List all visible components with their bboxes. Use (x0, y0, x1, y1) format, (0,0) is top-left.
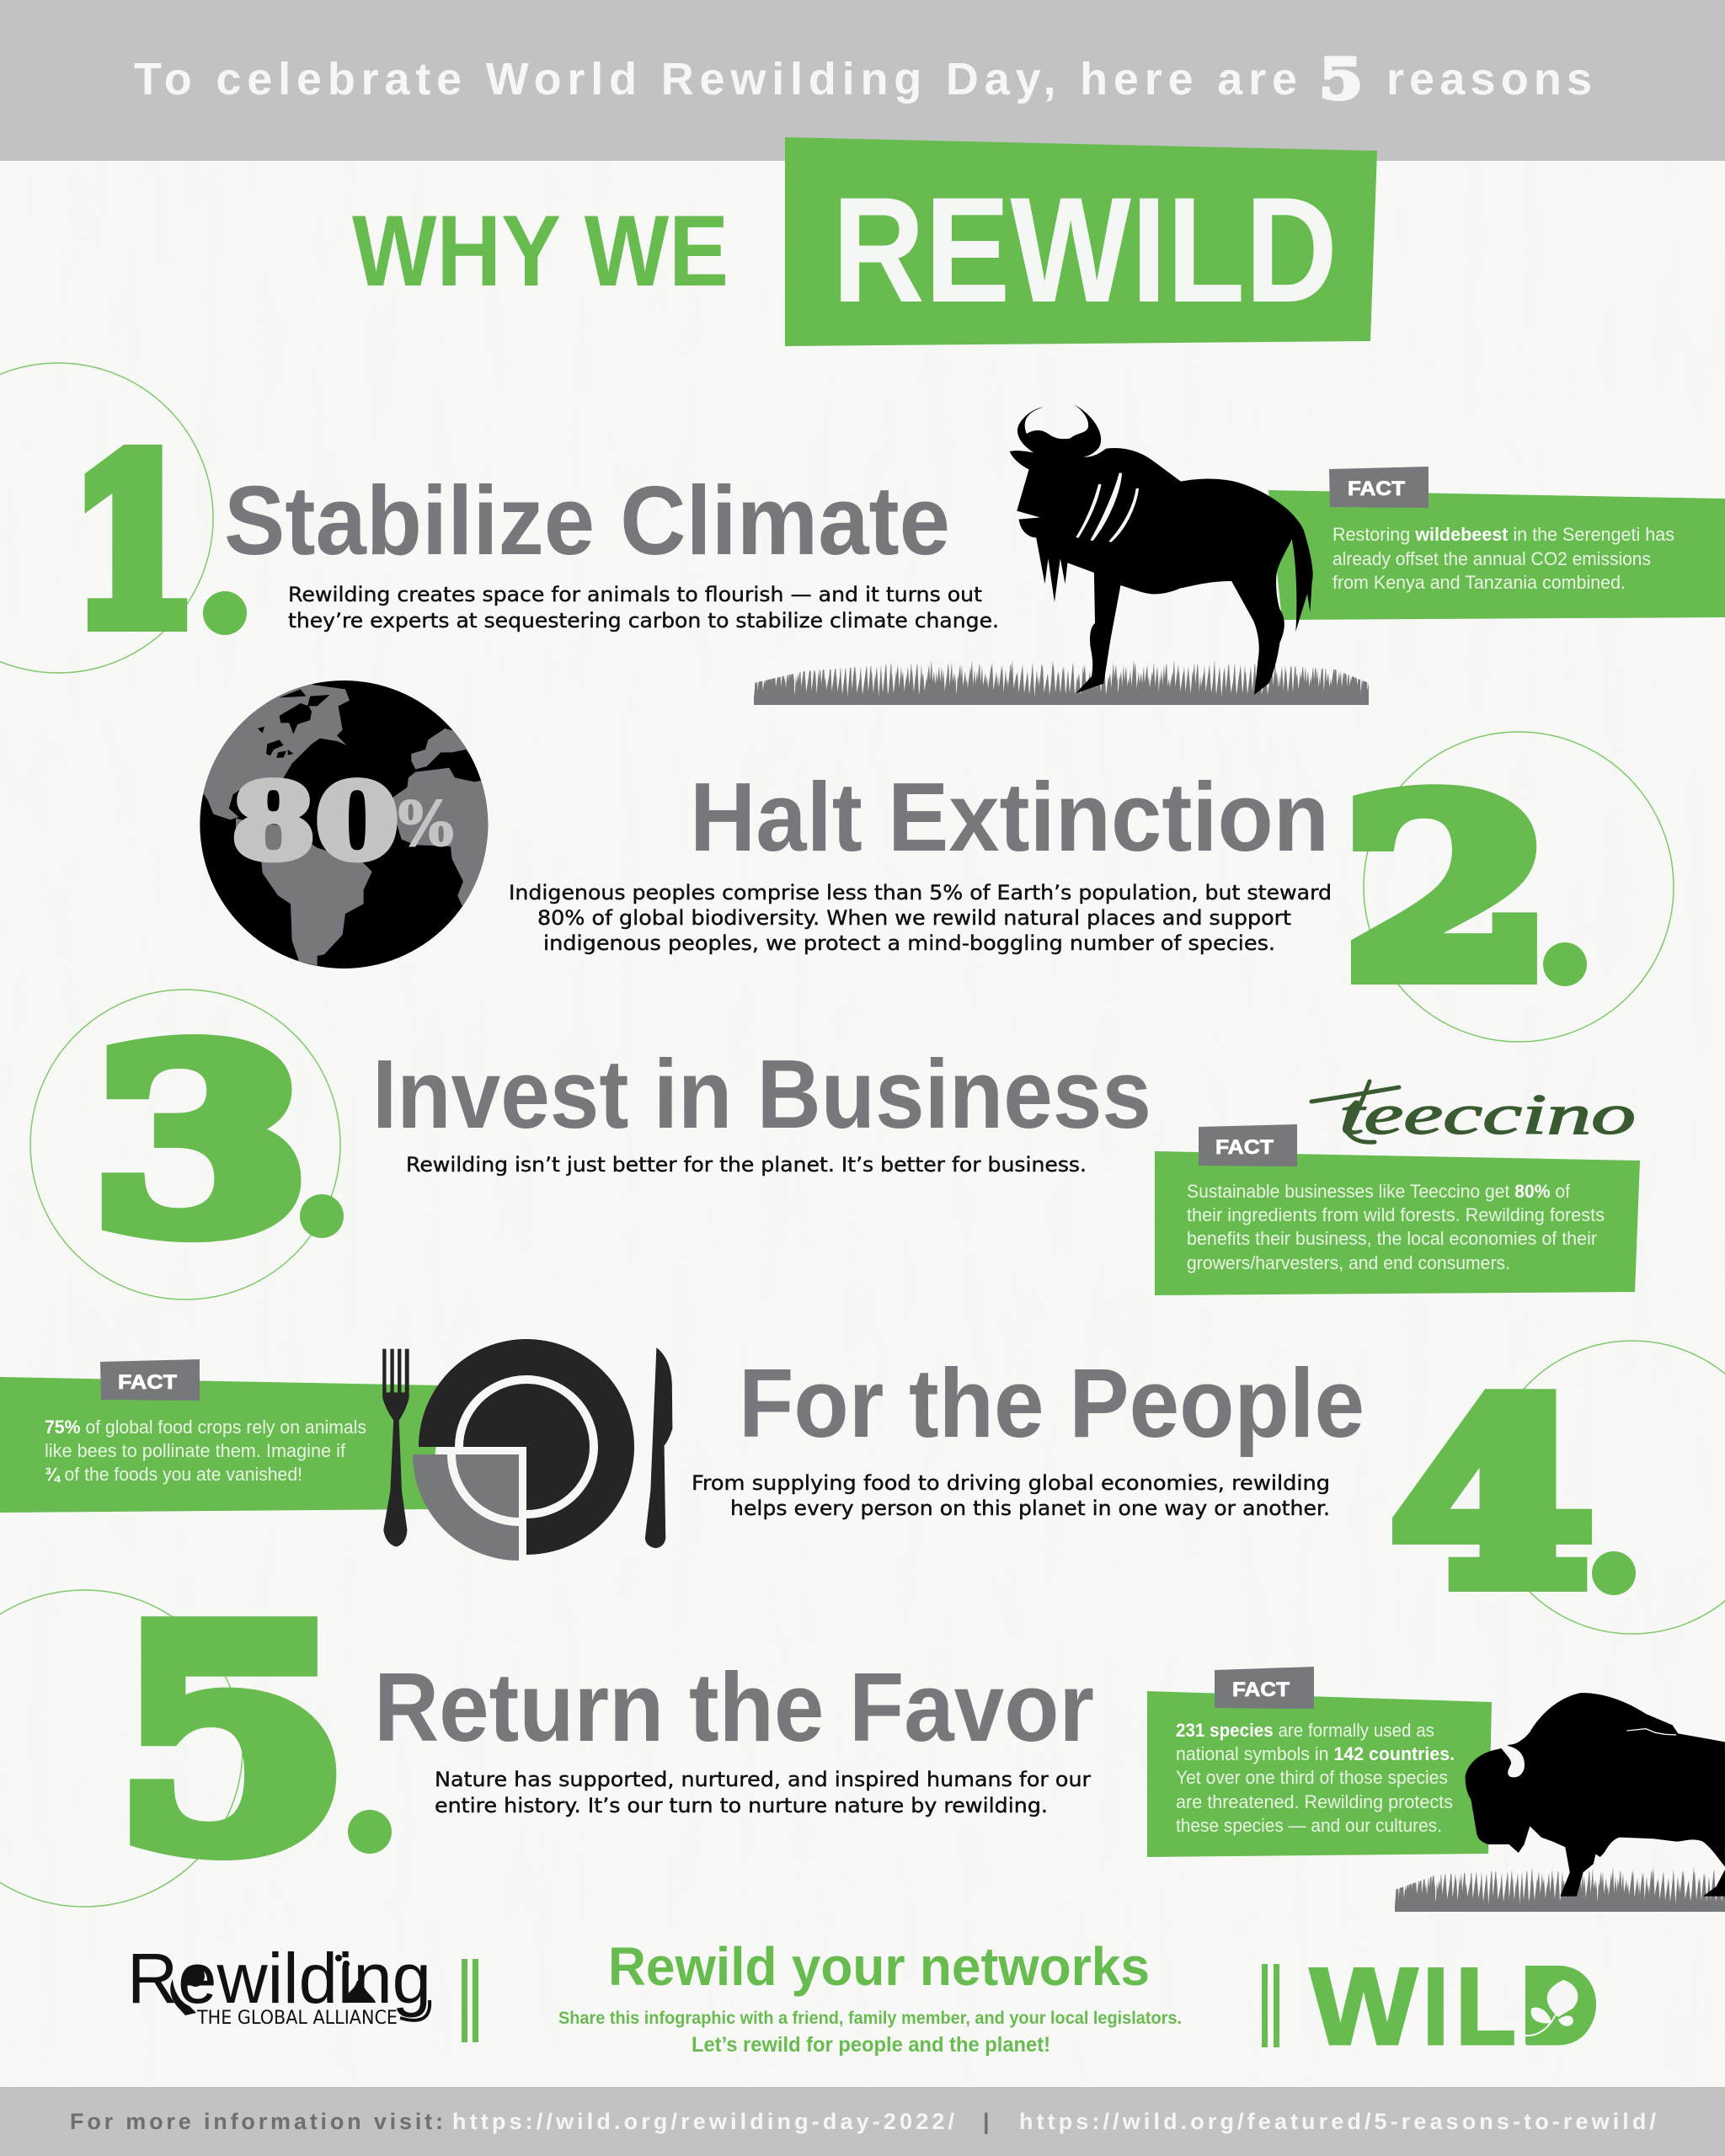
fact panel 4: 75% of global food crops rely on animals (45, 1417, 366, 1438)
call to action heading: Rewild your networks (608, 1936, 1150, 1997)
header band: 5 (1319, 46, 1363, 112)
icon: fork, plate and knife (382, 1339, 672, 1561)
logo: teeccino (1311, 1081, 1636, 1146)
fact panel 5: FACT (1232, 1678, 1290, 1701)
reason 3 heading: Invest in Business (372, 1039, 1151, 1149)
reason 5 text: Nature has supported, nurtured, and inspired humans for our (435, 1768, 1091, 1791)
logo: wild: L (1455, 1945, 1516, 2068)
logo: wild: D (1520, 1945, 1598, 2068)
reason 4 number: 4 (1392, 1351, 1592, 1640)
fact panel 5 (1147, 1667, 1492, 1857)
reason 4 text (692, 1471, 1330, 1520)
fact panel 3 (1155, 1124, 1640, 1295)
reason 1 heading: Stabilize Climate (224, 466, 950, 575)
icon: globe with 80%: % (398, 788, 454, 859)
fact panel 1: already offset the annual CO2 emissions (1332, 548, 1651, 569)
reason 2 number: 2 (1343, 747, 1551, 1032)
footer band: https://wild.org/featured/5-reasons-to-rewild/ (1019, 2109, 1656, 2134)
fact panel 1: Restoring wildebeest in the Serengeti has (1332, 524, 1674, 545)
reason 5 number (0, 1565, 392, 1916)
reason 2 text: 80% of global biodiversity. When we rewild natural places and support (537, 906, 1291, 930)
logo: wild: I (1423, 1945, 1449, 2068)
grass under bison (1395, 1865, 1725, 1912)
fact panel 1: from Kenya and Tanzania combined. (1332, 572, 1626, 593)
fact panel 5: are threatened. Rewilding protects (1176, 1791, 1453, 1812)
call to action text (558, 2009, 1182, 2057)
reason 4 text: helps every person on this planet in one way or another. (730, 1497, 1330, 1520)
reason 2 number (1343, 732, 1674, 1042)
fact panel 5: these species — and our cultures. (1176, 1815, 1442, 1836)
title banner: rewild (785, 137, 1377, 346)
icon: fork (382, 1349, 409, 1547)
fact panel 3: FACT (1215, 1136, 1274, 1159)
icon: wildebeest (1010, 404, 1313, 695)
reason 3 number (30, 990, 344, 1299)
reason 3 number: 3 (93, 995, 308, 1288)
header band: To celebrate World Rewilding Day, here are (134, 54, 1297, 104)
header band: reasons (1386, 54, 1592, 104)
fact panel 4: ¾ of the foods you ate vanished! (45, 1464, 302, 1485)
title banner: rewild: REWILD (832, 166, 1338, 334)
reason 2 text: Indigenous peoples comprise less than 5% of Earth’s population, but steward (509, 881, 1332, 905)
grass under wildebeest (754, 658, 1369, 705)
fact panel 1 (1268, 467, 1725, 620)
fact panel 3: benefits their business, the local economies of their (1187, 1228, 1597, 1249)
reason 5 text (435, 1768, 1091, 1817)
logo: wild: W (1310, 1945, 1418, 2068)
logo: teeccino: teeccino (1339, 1082, 1636, 1146)
reason 4 number (1392, 1341, 1725, 1640)
footer band: | (983, 2109, 990, 2134)
fact panel 5: national symbols in 142 countries. (1176, 1743, 1455, 1764)
footer band (0, 2087, 1725, 2156)
header band (0, 0, 1725, 161)
reason 4 heading: For the People (739, 1348, 1365, 1458)
double rule left (462, 1959, 478, 2042)
fact panel 3: growers/harvesters, and end consumers. (1187, 1252, 1510, 1273)
fact panel 5: 231 species are formally used as (1176, 1720, 1434, 1741)
call to action text: Share this infographic with a friend, family member, and your local legislators. (558, 2009, 1182, 2028)
reason 1 text: they’re experts at sequestering carbon to stabilize climate change. (288, 609, 999, 632)
fact panel 1: FACT (1348, 478, 1405, 500)
icon: globe with 80% (191, 680, 497, 969)
reason 4 text: From supplying food to driving global economies, rewilding (692, 1471, 1330, 1495)
reason 2 text (509, 881, 1332, 955)
reason 2 text: indigenous peoples, we protect a mind-boggling number of species. (543, 931, 1275, 955)
call to action text: Let’s rewild for people and the planet! (692, 2033, 1050, 2057)
reason 2 heading: Halt Extinction (690, 762, 1329, 872)
logo: rewilding: Rewilding (127, 1939, 431, 2018)
reason 1 text: Rewilding creates space for animals to flourish — and it turns out (288, 583, 982, 606)
logo: wild (1310, 1945, 1598, 2068)
icon: bison (1466, 1693, 1725, 1897)
reason 5 text: entire history. It’s our turn to nurture nature by rewilding. (435, 1794, 1048, 1817)
reason 5 number: 5 (115, 1565, 350, 1916)
reason 1 number (0, 363, 247, 675)
double rule right (1262, 1964, 1279, 2047)
icon: globe with 80%: 80 (232, 761, 399, 883)
logo: rewilding: THE GLOBAL ALLIANCE (196, 2008, 398, 2029)
fact panel 3: their ingredients from wild forests. Rewilding forests (1187, 1204, 1605, 1225)
icon: knife (645, 1348, 672, 1548)
title: why we: WHY WE (352, 195, 729, 307)
footer band: https://wild.org/rewilding-day-2022/ (452, 2109, 954, 2134)
icon: plate (413, 1339, 634, 1561)
fact panel 5: Yet over one third of those species (1176, 1767, 1448, 1788)
reason 5 heading: Return the Favor (374, 1652, 1094, 1762)
reason 1 text (288, 583, 999, 632)
fact panel 3: Sustainable businesses like Teeccino get 80% of (1187, 1181, 1571, 1202)
footer band: For more information visit: (70, 2109, 443, 2134)
reason 1 number: 1 (71, 410, 197, 675)
fact panel 4: like bees to pollinate them. Imagine if (45, 1440, 346, 1461)
fact panel 4: FACT (118, 1371, 177, 1394)
fact panel 4 (0, 1359, 442, 1513)
reason 3 text: Rewilding isn’t just better for the planet. It’s better for business. (406, 1153, 1087, 1177)
